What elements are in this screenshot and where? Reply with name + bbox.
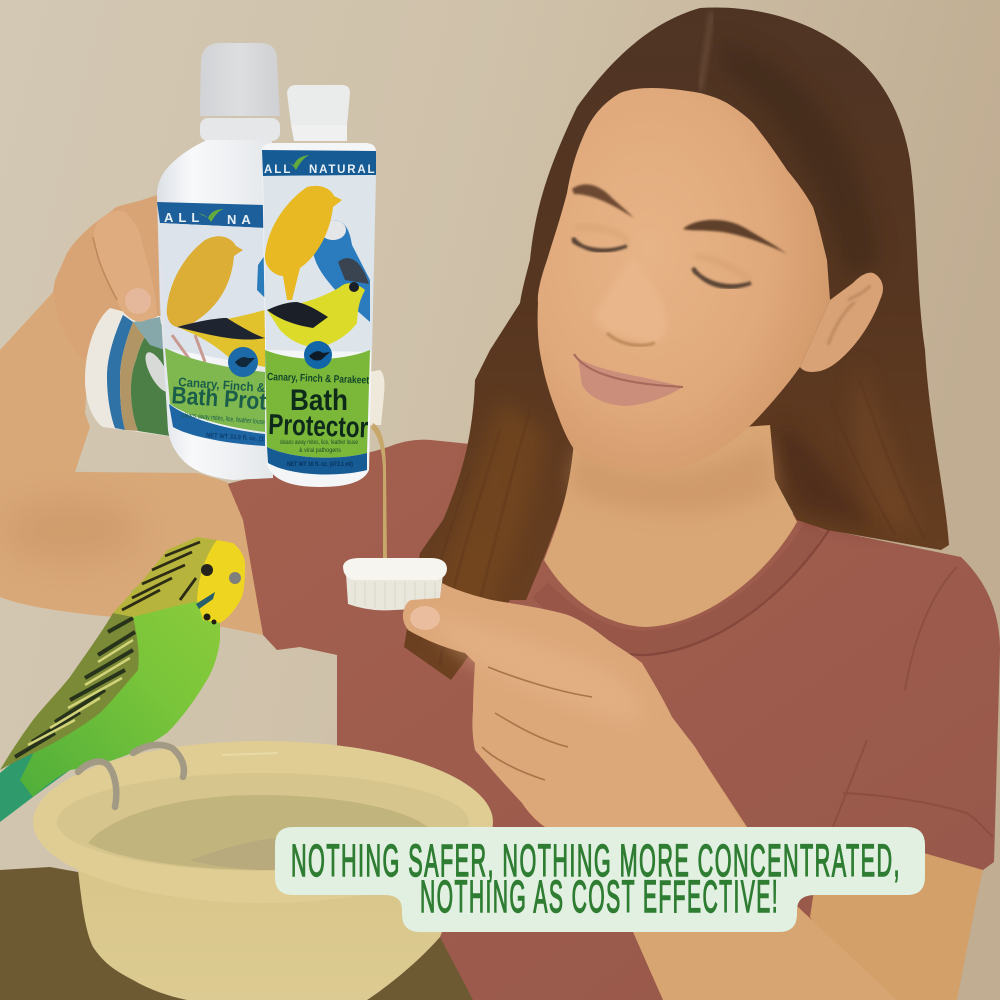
tail <box>0 745 70 822</box>
collar band <box>540 527 815 642</box>
small print line 1: cleans away mites, lice, feather louse <box>280 439 358 446</box>
warm highlight left <box>435 400 545 640</box>
large product line: Canary, Finch & <box>178 375 266 395</box>
large net weight: NET WT 33.8 fl. oz. (1 <box>206 432 265 443</box>
thumb crease <box>93 237 117 300</box>
dark crown right <box>720 40 880 280</box>
poured product bottle <box>85 308 384 437</box>
water reflection <box>190 835 340 870</box>
cup ribs <box>355 582 435 609</box>
cheek mark <box>196 592 215 609</box>
eye <box>201 564 213 576</box>
large bottle <box>157 43 280 480</box>
nose <box>595 257 667 344</box>
cup body <box>346 574 443 610</box>
inner ear shading <box>828 285 870 345</box>
dosing cup <box>343 558 447 610</box>
hair shading <box>420 12 925 665</box>
small round badge <box>304 341 332 369</box>
small print line 2: & viral pathogens <box>299 447 342 454</box>
bird wing on label <box>141 349 175 395</box>
forearm and upper arm <box>0 290 263 635</box>
shirt sleeve hem stitching <box>833 567 993 837</box>
sky patch on label <box>133 317 165 350</box>
small green label <box>265 350 370 458</box>
thumb shape <box>93 211 157 322</box>
small bottle <box>262 85 376 487</box>
neck shadow <box>572 440 775 512</box>
eye left <box>573 238 627 251</box>
hand shape <box>403 583 745 827</box>
parakeet head <box>320 220 346 240</box>
large lower blue band <box>169 404 265 446</box>
large green label <box>165 348 265 432</box>
poured liquid stream <box>371 423 387 562</box>
small goldfinch wing <box>267 302 328 328</box>
beak <box>229 572 241 584</box>
hand <box>53 195 160 360</box>
shirt <box>227 440 1000 1000</box>
large bottle cap <box>200 43 280 116</box>
head <box>197 540 245 623</box>
small product name 2: Protector <box>268 409 369 444</box>
woman <box>227 7 1000 1000</box>
large label title <box>171 375 267 426</box>
bowl body <box>78 860 470 1000</box>
hair <box>404 7 949 680</box>
small label NATURAL: NATURAL <box>309 164 376 176</box>
nape bars <box>122 542 200 610</box>
large bottle neck <box>200 118 280 141</box>
large goldfinch wing <box>177 318 265 340</box>
small bird panel <box>263 175 376 352</box>
collar <box>530 530 829 655</box>
small badge bird <box>309 351 330 360</box>
hair part <box>700 12 712 90</box>
bottle end cap <box>85 308 175 437</box>
fingernail <box>410 606 440 630</box>
mouth <box>578 358 683 406</box>
small product line: Canary, Finch & Parakeet <box>267 371 370 387</box>
parakeet body <box>313 220 370 322</box>
small product name 1: Bath <box>290 384 348 417</box>
small canary <box>265 186 342 300</box>
hand highlight <box>430 612 643 725</box>
eye right <box>693 268 751 287</box>
ear <box>800 273 883 372</box>
thumb <box>93 211 157 322</box>
upper arm <box>810 827 983 1000</box>
left arm <box>0 195 263 635</box>
wing bars <box>15 618 135 757</box>
parakeet wing <box>338 258 369 284</box>
water <box>88 795 435 870</box>
dark behind neck <box>779 420 880 530</box>
eyebrow right <box>683 220 787 254</box>
wing <box>0 613 139 770</box>
blue label strip <box>107 315 133 430</box>
rim highlight <box>222 753 278 755</box>
arm shading <box>0 500 140 560</box>
budgie <box>0 537 245 822</box>
spout <box>366 370 384 425</box>
eye lid shadows <box>575 227 750 280</box>
large bottle body <box>157 140 273 480</box>
small goldfinch cap <box>349 282 359 292</box>
scene label <box>131 320 170 436</box>
caption bubble <box>275 827 925 932</box>
small bottle neck <box>291 125 347 141</box>
thumbnail <box>125 288 151 314</box>
large badge bird <box>235 357 255 367</box>
feet <box>78 745 184 807</box>
large perch legs <box>172 335 205 362</box>
small lower blue band <box>267 447 367 474</box>
throat spots <box>204 614 216 624</box>
finger creases <box>482 667 592 780</box>
small leaf logo <box>285 155 310 170</box>
sandy strip <box>120 322 150 431</box>
lip line <box>574 354 683 387</box>
table <box>0 867 473 1000</box>
large blue parakeet edge <box>257 255 265 298</box>
small bottle cap <box>287 85 350 125</box>
large canary <box>167 236 243 327</box>
body <box>20 537 245 797</box>
large bird panel <box>160 223 265 367</box>
wing pale bars <box>28 640 133 745</box>
spot two <box>212 620 216 624</box>
small blue band <box>262 150 376 176</box>
large leaf logo <box>198 209 224 222</box>
bubble background <box>275 827 925 932</box>
large label NA: NA <box>227 212 256 227</box>
large blue band <box>157 202 265 228</box>
cup rim <box>343 558 447 580</box>
large product name: Bath Prot <box>171 382 267 416</box>
bowl rim <box>33 741 493 903</box>
large goldfinch <box>177 310 265 367</box>
large small print: cleans away mites, lice, feather louse <box>182 412 265 426</box>
small label ALL: ALL <box>264 164 292 176</box>
large round badge <box>228 347 258 377</box>
small net weight: NET WT 16 fl. oz. (473.1 ml) <box>287 461 353 468</box>
eyebrow left <box>572 184 634 218</box>
large label ALL: ALL <box>164 210 204 225</box>
bowl inner wall <box>57 773 469 871</box>
nose underside <box>607 333 655 345</box>
small goldfinch <box>267 283 365 348</box>
face <box>538 88 830 472</box>
strands <box>420 380 925 665</box>
parakeet <box>313 220 370 322</box>
forearm <box>590 740 897 1000</box>
hand holding cup <box>403 583 745 827</box>
neck <box>544 425 797 627</box>
small bottle body <box>262 143 376 487</box>
bowl of water <box>33 741 493 1000</box>
spot one <box>204 614 210 620</box>
nape <box>113 537 217 617</box>
warm highlight right <box>854 360 920 530</box>
